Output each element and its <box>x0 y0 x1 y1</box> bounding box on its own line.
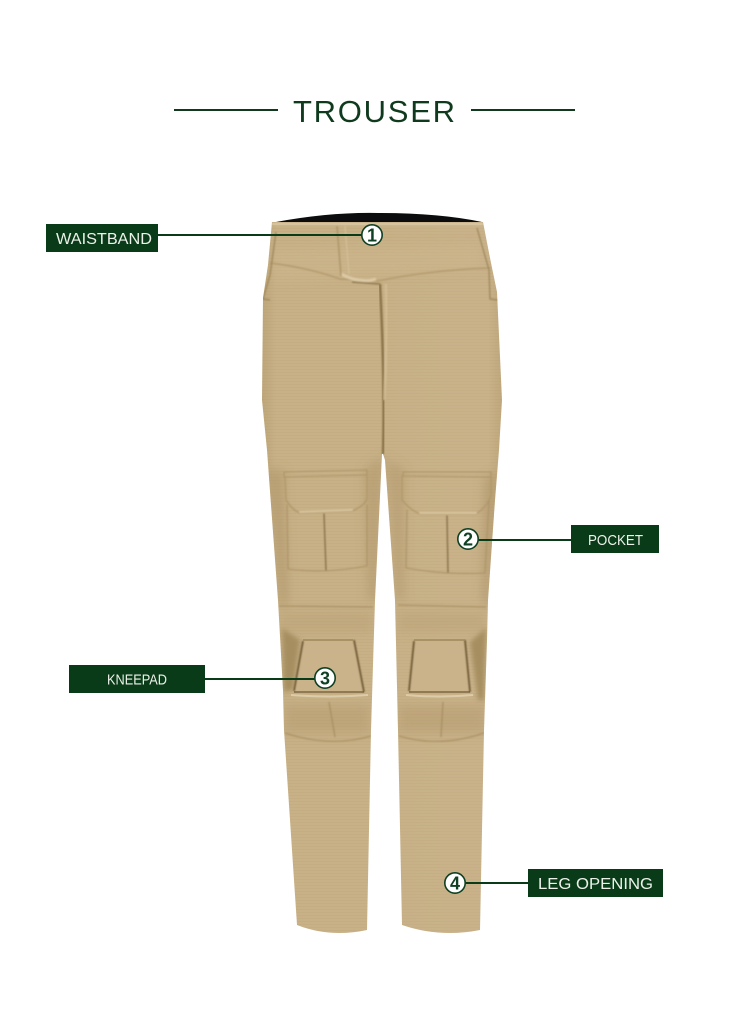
left cargo pocket <box>284 470 491 573</box>
callout 2: pocket <box>458 525 659 553</box>
trouser body <box>262 222 502 933</box>
label: waistband <box>46 224 158 252</box>
marker 4: 4 <box>450 874 460 894</box>
marker 3: 3 <box>320 668 330 688</box>
callout 1: waistband <box>46 224 382 252</box>
right kneepad pocket <box>406 639 473 696</box>
right kneepad reinforcement <box>470 628 486 700</box>
waistband details <box>263 224 498 300</box>
marker 1: 1 <box>367 226 377 246</box>
marker 3 <box>315 668 335 688</box>
waist opening <box>276 213 482 222</box>
label: pocket <box>571 525 659 553</box>
label: pocket: POCKET <box>588 532 643 549</box>
label: waistband: WAISTBAND <box>56 231 152 248</box>
callout 3: kneepad <box>69 665 335 693</box>
knee seams <box>279 605 486 741</box>
marker 1 <box>362 225 382 246</box>
fabric shading <box>268 461 497 732</box>
callout 4: leg opening <box>445 869 663 897</box>
label: kneepad <box>69 665 205 693</box>
label: kneepad: KNEEPAD <box>107 672 167 688</box>
fly seam <box>380 284 384 454</box>
marker 4 <box>445 873 465 894</box>
marker 2 <box>458 529 478 550</box>
trouser illustration <box>255 213 510 940</box>
right cargo pocket <box>403 472 491 477</box>
label: leg opening <box>528 869 663 897</box>
marker 2: 2 <box>463 530 473 550</box>
left kneepad reinforcement <box>282 628 300 692</box>
title text: TROUSER <box>293 94 455 129</box>
label: leg opening: LEG OPENING <box>538 876 653 893</box>
left kneepad pocket <box>291 639 368 696</box>
